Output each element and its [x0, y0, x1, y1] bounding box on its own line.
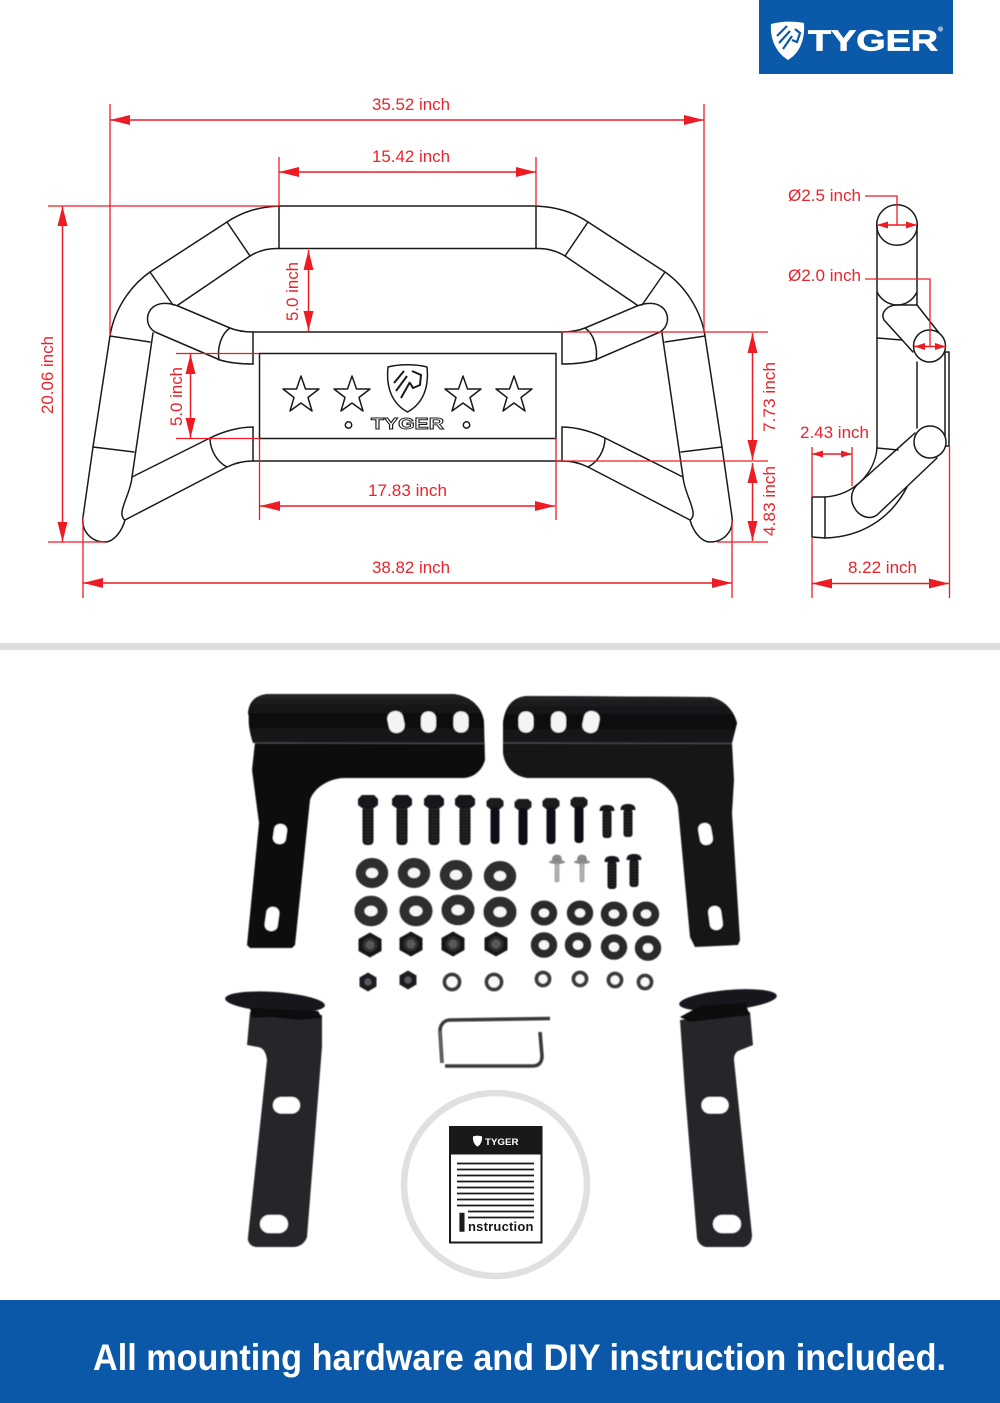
lower mount tube	[852, 433, 937, 517]
icon: tiger shield	[771, 22, 804, 60]
icon: star 2	[334, 376, 370, 411]
callout: instruction manual circle	[404, 1093, 587, 1276]
bracket: upper left	[247, 694, 485, 948]
dimension: main tube diameter	[788, 186, 917, 225]
mounting hole right	[463, 422, 470, 428]
right half of tube outline	[536, 206, 732, 542]
top tube	[877, 205, 917, 245]
dimension: top bar width	[279, 147, 536, 206]
skid plate	[260, 354, 556, 438]
dimension: overall width: 38.82 inch	[372, 558, 450, 577]
dimension: upper gap	[283, 250, 308, 331]
bracket: upper right	[503, 696, 740, 947]
hardware: lock washers	[444, 972, 652, 990]
footer banner	[0, 1300, 1000, 1403]
dimension: plate height: 5.0 inch	[167, 367, 186, 426]
hardware: silver screws	[549, 855, 590, 882]
dimension: lower height: 4.83 inch	[760, 466, 779, 536]
dimension: upper gap: 5.0 inch	[283, 262, 302, 321]
dimension: top bar width: 15.42 inch	[372, 147, 450, 166]
icon: tiger shield on plate	[388, 365, 427, 412]
registered mark	[938, 26, 943, 32]
logo: TYGER badge	[759, 0, 953, 74]
dimension: overall depth	[812, 446, 950, 598]
diagram: side view of bull bar	[812, 205, 949, 538]
dimension: side offset	[800, 423, 869, 497]
bracket: lower right	[678, 986, 778, 1247]
icon: star 4	[496, 376, 532, 411]
dimension: overall height: 20.06 inch	[38, 336, 57, 414]
dimension: overall depth: 8.22 inch	[848, 558, 917, 577]
manual title: nstruction	[468, 1219, 534, 1234]
dimension: plate width: 17.83 inch	[368, 481, 447, 500]
manual header wordmark: TYGER	[485, 1137, 519, 1148]
manual text lines	[457, 1164, 534, 1218]
dimension: side offset: 2.43 inch	[800, 423, 869, 442]
footer text: All mounting hardware and DIY instruction included.	[93, 1336, 946, 1378]
dimension: overall width	[83, 517, 732, 598]
dimension: mid height: 7.73 inch	[760, 362, 779, 432]
plate wordmark: TYGER	[371, 416, 445, 433]
hardware: short bolts	[600, 804, 642, 889]
manual header	[449, 1126, 542, 1154]
icon: star 3	[445, 376, 481, 411]
hardware: medium bolts	[486, 797, 588, 845]
dimension: plate height	[167, 354, 259, 438]
upper mount tube	[883, 305, 943, 352]
dimension: secondary tube diameter	[788, 266, 946, 346]
dimension: lower height	[717, 463, 779, 542]
mounting hole left	[345, 422, 352, 428]
dimension: overall top width	[110, 95, 704, 336]
icon: star 1	[283, 376, 319, 411]
centre bars	[253, 206, 562, 461]
manual page	[449, 1126, 542, 1242]
diagram: front view of bull bar	[83, 206, 732, 542]
bracket: lower left	[224, 989, 326, 1247]
hardware: large washers	[360, 863, 512, 922]
hardware: small washers	[535, 904, 657, 957]
divider band	[0, 643, 1000, 650]
icon: small shield	[473, 1136, 482, 1146]
logo wordmark: TYGER	[808, 26, 938, 58]
dimension: overall height	[38, 206, 279, 542]
dimension: mid height	[556, 332, 779, 461]
dimension: main tube diameter: Ø2.5 inch	[788, 186, 861, 205]
dimension: overall top width: 35.52 inch	[372, 95, 450, 114]
dimension: plate width	[260, 438, 556, 520]
hardware: hex keys	[440, 1018, 550, 1066]
dimension: secondary tube diameter: Ø2.0 inch	[788, 266, 861, 285]
mounting plate edge	[945, 352, 949, 446]
hardware: nuts	[358, 932, 508, 992]
hardware: large bolts	[358, 795, 475, 845]
photo: included hardware	[224, 694, 778, 1247]
left half of tube outline	[83, 206, 279, 542]
manual title: I	[458, 1209, 465, 1237]
